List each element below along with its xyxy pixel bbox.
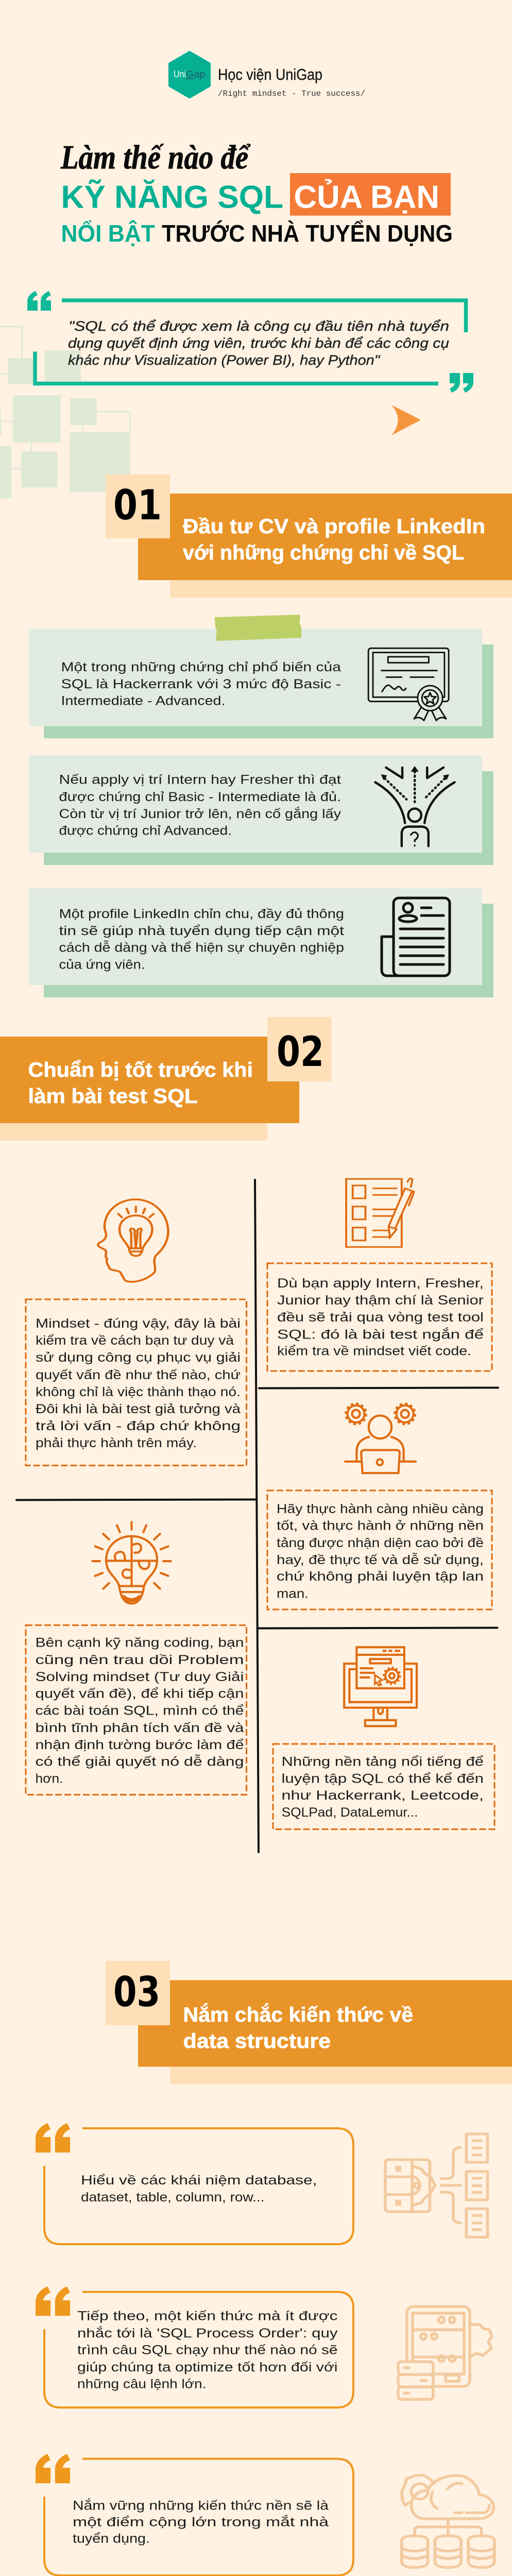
icon: certificate bbox=[368, 648, 449, 721]
box text bbox=[35, 1635, 244, 1786]
box text: SQLPad, DataLemur... bbox=[281, 1805, 418, 1820]
panel: card 3 LinkedIn profile bbox=[29, 888, 493, 997]
dashed text box bbox=[26, 1299, 246, 1465]
icon: quote mark bbox=[36, 2454, 70, 2483]
panel: practice platforms bbox=[273, 1647, 494, 1829]
icon: database tree bbox=[385, 2134, 488, 2237]
box text: hay, đề thực tế và dễ sử dụng, bbox=[277, 1552, 484, 1567]
quote text bbox=[68, 318, 449, 368]
title highlight box bbox=[290, 173, 451, 215]
logo tagline: /Right mindset - True success/ bbox=[218, 89, 365, 98]
icon: quote mark bbox=[36, 2123, 70, 2153]
section 01 header bbox=[106, 474, 512, 598]
box text: các bài toán SQL, mình có thể bbox=[35, 1703, 244, 1718]
box text bbox=[281, 1755, 484, 1820]
icon: monitor with window bbox=[344, 1647, 417, 1726]
panel text: tuyển dụng. bbox=[73, 2532, 150, 2546]
box text: bình tĩnh phân tích vấn đề và bbox=[35, 1721, 244, 1735]
quote text: "SQL có thể được xem là công cụ đầu tiên nhà tuyển bbox=[69, 318, 449, 334]
box text: Dù bạn apply Intern, Fresher, bbox=[277, 1276, 484, 1291]
intro quote bbox=[27, 291, 473, 435]
box text: phải thực hành trên máy. bbox=[36, 1436, 197, 1450]
card text: Một trong những chứng chỉ phổ biến của bbox=[61, 660, 341, 674]
panel text: trình câu SQL chạy như thế nào nó sẽ bbox=[77, 2343, 338, 2358]
dashed text box bbox=[267, 1490, 492, 1609]
header band bbox=[0, 1123, 267, 1141]
card body bbox=[29, 755, 482, 853]
panel: foundations bbox=[36, 2454, 494, 2575]
box text: có thể giải quyết nó dễ dàng bbox=[35, 1754, 244, 1769]
header band bbox=[170, 580, 512, 598]
icon: servers and gear panel bbox=[398, 2307, 492, 2399]
card text bbox=[61, 660, 341, 708]
number 02: 02 bbox=[277, 1028, 324, 1076]
number 01: 01 bbox=[113, 481, 162, 529]
icon: puzzle light bulb bbox=[92, 1522, 171, 1603]
icon: quote mark bbox=[36, 2286, 70, 2316]
card body bbox=[29, 888, 482, 985]
number box bbox=[267, 1017, 332, 1081]
panel: mindset bbox=[26, 1199, 246, 1465]
box text: như Hackerrank, Leetcode, bbox=[281, 1788, 484, 1803]
panel text: Tiếp theo, một kiến thức mà ít được bbox=[77, 2309, 338, 2324]
box text: man. bbox=[277, 1587, 309, 1601]
icon: cloud and databases bbox=[402, 2475, 494, 2567]
box text: chứ không phải luyện tập lan bbox=[277, 1569, 484, 1584]
card text: Một profile LinkedIn chỉn chu, đầy đủ thông bbox=[59, 907, 344, 921]
number box bbox=[106, 1961, 170, 2025]
panel: test tool bbox=[267, 1178, 492, 1371]
title line 3 black: TRƯỚC NHÀ TUYỂN DỤNG bbox=[162, 220, 453, 247]
title bbox=[60, 139, 453, 247]
box text: Đôi khi là bài test giả tưởng và bbox=[36, 1402, 241, 1416]
title line 1: Làm thế nào để bbox=[60, 139, 251, 176]
panel: practice bbox=[267, 1404, 492, 1609]
box text: kiểm tra về mindset viết code. bbox=[277, 1344, 471, 1358]
box text: quyết vấn đề như thế nào, chứ bbox=[36, 1368, 241, 1382]
rounded quote frame bbox=[44, 2128, 353, 2244]
box text: kiểm tra về cách bạn tư duy và bbox=[36, 1333, 234, 1348]
icon: hexagon logo: Uni bbox=[174, 69, 186, 79]
box text: Junior hay thậm chí là Senior bbox=[277, 1293, 484, 1308]
header bar bbox=[138, 1980, 512, 2067]
card text bbox=[59, 773, 342, 838]
icon: hexagon logo bbox=[170, 53, 209, 97]
quote text: khác như Visualization (Power BI), hay Python" bbox=[68, 352, 381, 368]
box text: luyện tập SQL có thể kể đến bbox=[281, 1771, 484, 1786]
card shadow bbox=[44, 904, 493, 997]
panel text: những câu lệnh lớn. bbox=[77, 2377, 206, 2392]
card body bbox=[29, 629, 482, 726]
section 01 header: với những chứng chỉ về SQL bbox=[183, 541, 464, 564]
card text: Intermediate - Advanced. bbox=[61, 693, 226, 708]
box text: tảng được nhận diện cao bởi đề bbox=[277, 1536, 484, 1550]
box text bbox=[277, 1502, 484, 1601]
title line 2 white: CỦA BẠN bbox=[294, 179, 439, 215]
rounded quote frame bbox=[44, 2292, 353, 2408]
decorative background squares bbox=[0, 327, 130, 499]
rounded quote frame bbox=[44, 2459, 353, 2575]
panel: data concepts bbox=[36, 2123, 488, 2244]
icon: person at laptop with gears bbox=[345, 1404, 416, 1473]
panel text: nhắc tới là 'SQL Process Order': quy bbox=[77, 2326, 338, 2341]
box text: Bên cạnh kỹ năng coding, bạn bbox=[35, 1635, 244, 1650]
box text: Những nền tảng nổi tiếng để bbox=[281, 1755, 484, 1769]
panel text bbox=[77, 2309, 338, 2392]
card text: Nếu apply vị trí Intern hay Fresher thì đạt bbox=[59, 773, 341, 787]
box text: tốt, và thực hành ở những nền bbox=[277, 1519, 484, 1533]
box text: nhận định tường bước làm để bbox=[35, 1738, 244, 1752]
box text: Hãy thực hành càng nhiều càng bbox=[277, 1502, 484, 1516]
title line 2 green: KỸ NĂNG SQL bbox=[61, 179, 283, 215]
card text: được chứng chỉ Advanced. bbox=[59, 823, 232, 838]
icon: checklist and pen bbox=[346, 1178, 414, 1247]
card shadow bbox=[44, 771, 493, 865]
box text: cũng nên trau dồi Problem bbox=[35, 1653, 244, 1667]
tape bbox=[214, 615, 301, 641]
dashed text box bbox=[273, 1744, 494, 1829]
icon: person choosing paths bbox=[375, 767, 455, 846]
panel text: Nắm vững những kiến thức nền sẽ là bbox=[73, 2498, 329, 2513]
box text: Solving mindset (Tư duy Giải bbox=[35, 1670, 244, 1684]
header bar bbox=[0, 1037, 299, 1123]
card text: được chứng chỉ Basic - Intermediate là đủ. bbox=[59, 790, 341, 804]
panel text bbox=[81, 2173, 317, 2205]
box text: không chỉ là việc thành thạo nó. bbox=[36, 1385, 241, 1399]
box text: SQL: đó là bài test ngắn để bbox=[277, 1327, 484, 1342]
heading text: Chuẩn bị tốt trước khi bbox=[28, 1059, 253, 1081]
number 03: 03 bbox=[113, 1968, 160, 2016]
icon: hexagon logo: Gap bbox=[186, 69, 205, 79]
panel: card 2 intern or junior bbox=[29, 755, 493, 865]
panel text: dataset, table, column, row... bbox=[81, 2190, 265, 2205]
card text: của ứng viên. bbox=[59, 957, 145, 972]
number box bbox=[106, 474, 170, 538]
box text bbox=[277, 1276, 484, 1358]
box text: sử dụng công cụ phục vụ giải bbox=[36, 1350, 241, 1365]
quote frame bbox=[35, 300, 466, 383]
dashed text box bbox=[26, 1625, 246, 1795]
panel: problem solving bbox=[26, 1522, 246, 1795]
heading text: Đầu tư CV và profile LinkedIn bbox=[183, 515, 485, 538]
section 03 header: data structure bbox=[183, 2030, 331, 2053]
card text: Còn từ vị trí Junior trở lên, nên cố gắng lấy bbox=[59, 806, 342, 821]
dashed text box bbox=[267, 1263, 492, 1371]
box text: quyết vấn đề), để khi tiếp cận bbox=[35, 1687, 244, 1701]
panel: card 1 certificate bbox=[29, 615, 493, 738]
icon: orange arrow bbox=[391, 405, 421, 435]
header band bbox=[170, 2067, 512, 2084]
box text: đều sẽ trải qua vòng test tool bbox=[277, 1310, 484, 1325]
title line 3 green: NỔI BẬT bbox=[61, 220, 155, 247]
panel text: giúp chúng ta optimize tốt hơn đối với bbox=[77, 2360, 338, 2375]
card shadow bbox=[44, 645, 493, 738]
divider lines for section 02 bbox=[16, 1180, 498, 1852]
section 02 header bbox=[0, 1017, 332, 1141]
box text: trả lời vấn - đáp chứ không bbox=[36, 1419, 241, 1433]
panel text bbox=[73, 2498, 329, 2546]
card text: SQL là Hackerrank với 3 mức độ Basic - bbox=[61, 677, 341, 691]
logo name: Học viện UniGap bbox=[218, 65, 322, 83]
panel text: Hiểu về các khái niệm database, bbox=[81, 2173, 317, 2188]
icon: head with light bulb bbox=[98, 1199, 168, 1282]
section 03 header bbox=[106, 1961, 512, 2084]
card text: cách dễ dàng và thể hiện sự chuyên nghiệp bbox=[59, 940, 344, 955]
box text: hơn. bbox=[35, 1771, 63, 1786]
quote text: dụng quyết định ứng viên, trước khi bàn để các công cụ bbox=[68, 335, 449, 351]
section 02 header: làm bài test SQL bbox=[28, 1085, 198, 1108]
heading text: Nắm chắc kiến thức về bbox=[183, 2003, 413, 2026]
panel: SQL process order bbox=[36, 2286, 492, 2408]
header bar bbox=[138, 494, 512, 580]
panel text: một điểm cộng lớn trong mắt nhà bbox=[73, 2514, 329, 2530]
box text: Mindset - đúng vậy, đây là bài bbox=[36, 1316, 241, 1331]
icon: opening quote mark bbox=[27, 291, 51, 311]
box text bbox=[36, 1316, 241, 1450]
icon: closing quote mark bbox=[450, 373, 473, 393]
logo: Học viện UniGap bbox=[170, 53, 365, 98]
icon: resume document bbox=[382, 898, 450, 976]
card text bbox=[59, 907, 344, 972]
card text: tin sẽ giúp nhà tuyển dụng tiếp cận một bbox=[59, 924, 344, 938]
